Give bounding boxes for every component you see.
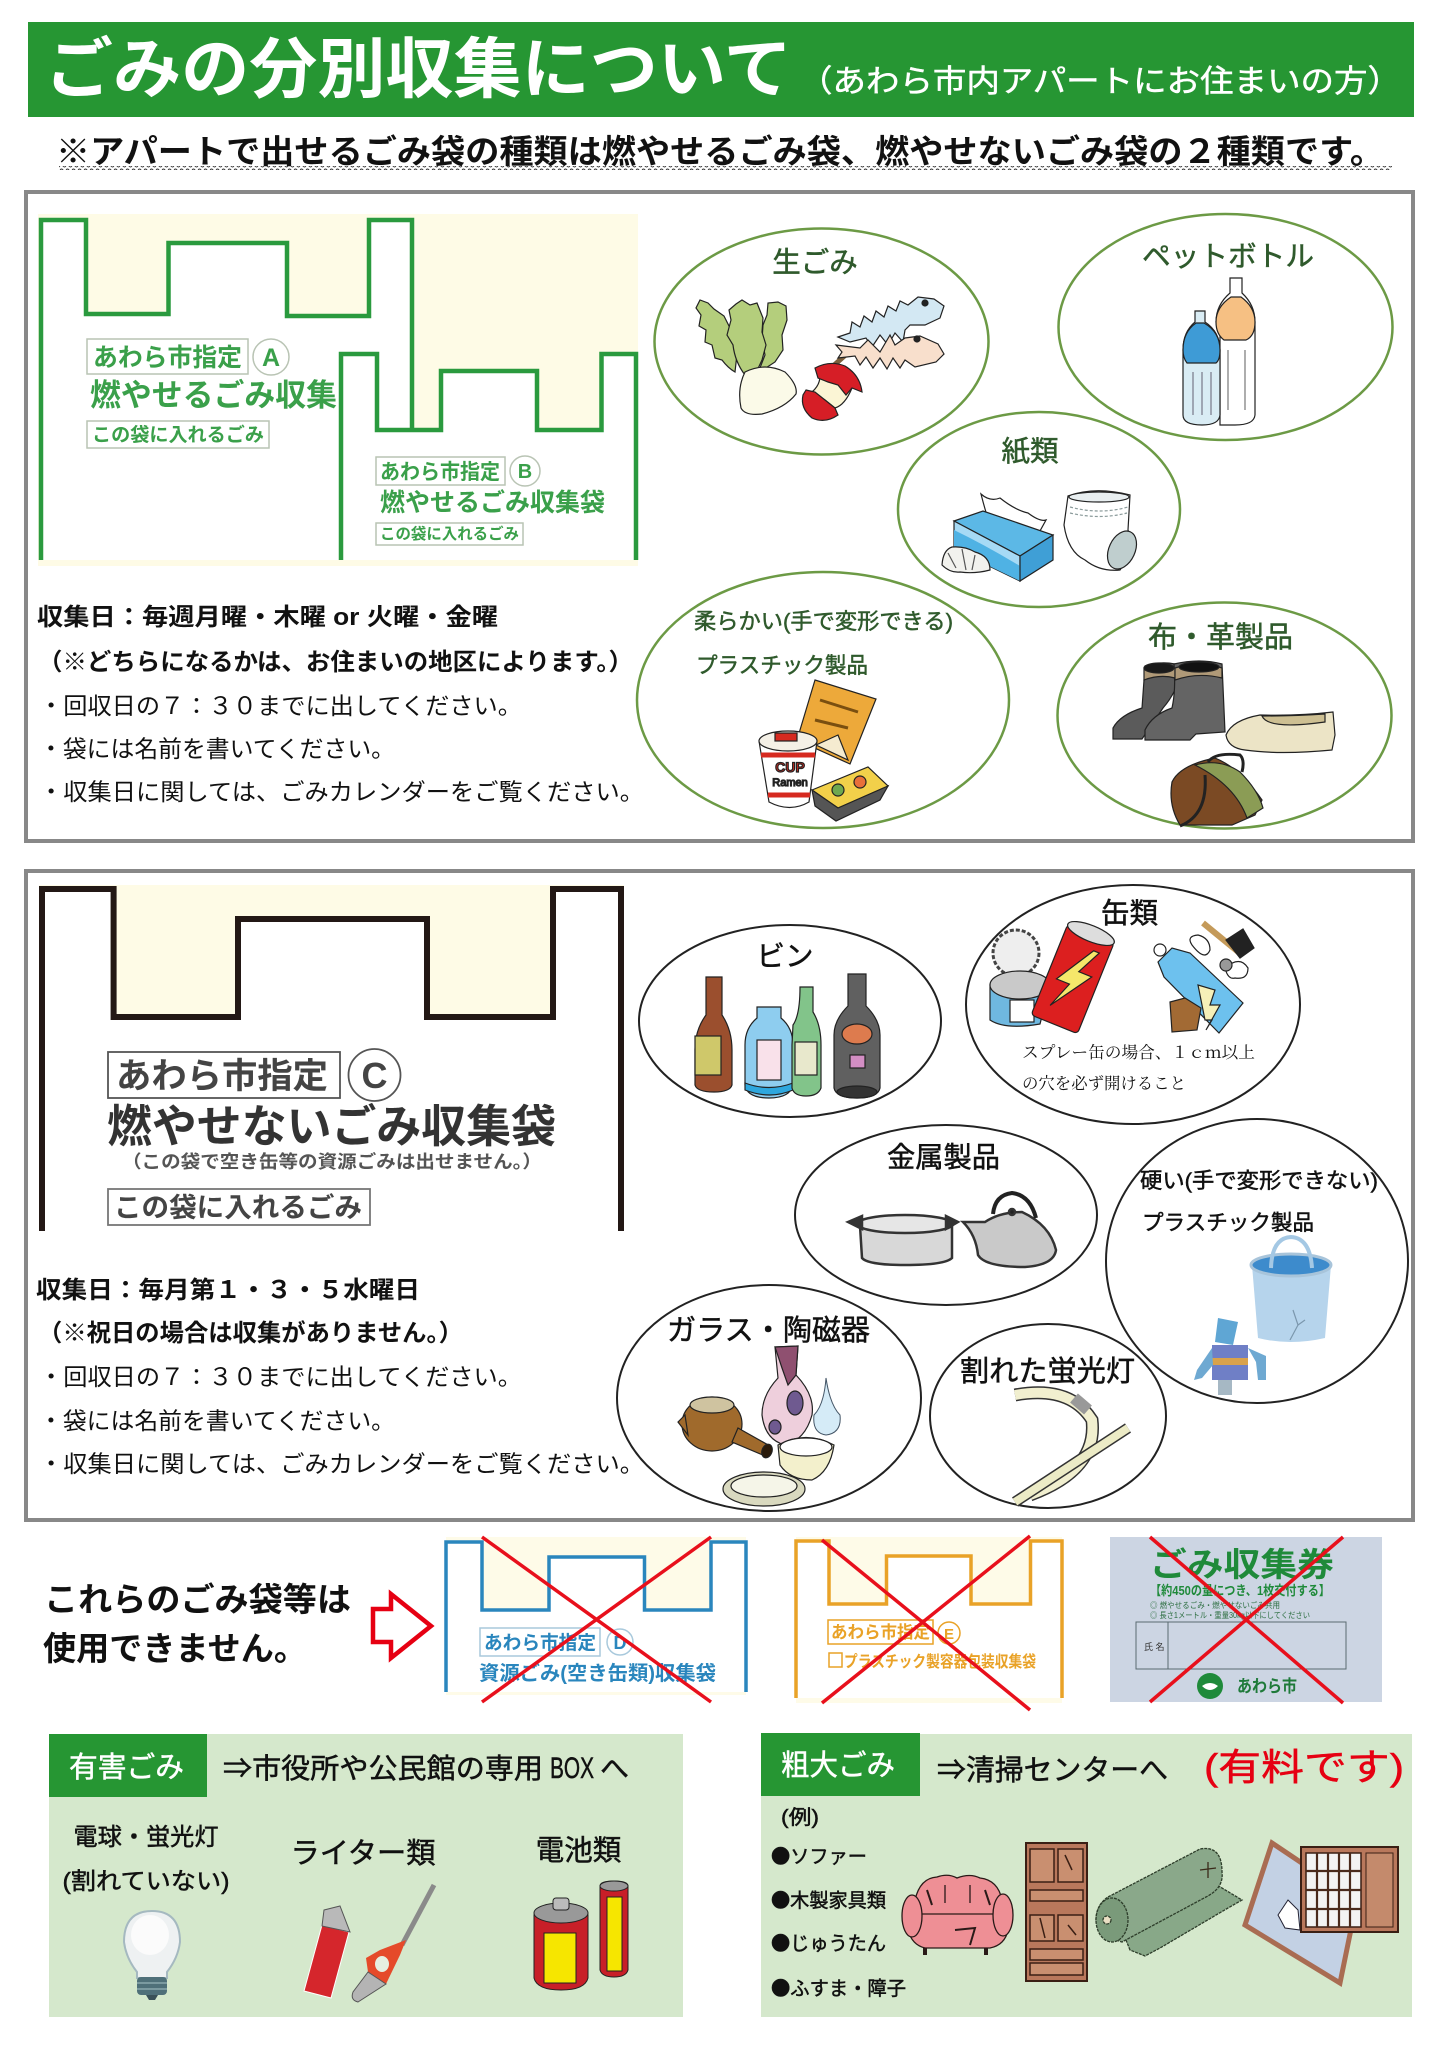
bubble: cans xyxy=(966,885,1300,1124)
oversized tab: 粗大ごみ xyxy=(781,1749,895,1782)
icon: circular lamp xyxy=(1015,1393,1092,1495)
icon: kettle xyxy=(963,1193,1056,1267)
panel: non-burnable waste xyxy=(26,871,1413,1520)
prohibited message: 使用できません。 xyxy=(43,1630,307,1667)
icon: spray can and hammer xyxy=(1154,923,1254,1033)
bubble: paper xyxy=(898,412,1180,607)
icon: tissue box xyxy=(942,494,1053,581)
hazardous destination: へ xyxy=(600,1753,629,1784)
bubble: PET bottles: ペットボトル xyxy=(1142,241,1314,273)
icon: shoe xyxy=(1226,712,1335,752)
bag C xyxy=(39,885,624,1231)
icon: glass bottles xyxy=(695,974,880,1098)
bubble: soft plastics: 柔らかい(手で変形できる) xyxy=(694,609,953,634)
bubble: metal products: 金属製品 xyxy=(887,1142,1000,1174)
icon: light bulb xyxy=(124,1911,180,2000)
collection schedule text: ・袋には名前を書いてください。 xyxy=(39,1408,395,1434)
collection schedule text: ・回収日の７：３０までに出してください。 xyxy=(39,1364,522,1390)
icon: daikon radish xyxy=(696,300,796,414)
icon: carpet roll xyxy=(1096,1848,1242,1965)
title: ごみの分別収集について xyxy=(45,32,792,106)
oversized tab xyxy=(761,1733,920,1796)
bubble: kitchen waste xyxy=(654,228,988,454)
bulb label xyxy=(62,1824,230,1894)
bubble: PET bottles xyxy=(1058,214,1392,440)
bag C: あわら市指定 xyxy=(116,1057,328,1096)
icon: sofa xyxy=(902,1875,1013,1955)
bag C label xyxy=(108,1052,340,1098)
spray can warning: の穴を必ず開けること xyxy=(1022,1074,1186,1093)
prohibited message xyxy=(43,1581,351,1667)
icon: cup noodle: Ramen xyxy=(772,777,808,789)
bubble: bottles xyxy=(639,925,941,1117)
icon: cabinet xyxy=(1026,1843,1087,1981)
hazardous tab: 有害ごみ xyxy=(69,1751,184,1784)
icon: lighters xyxy=(304,1885,434,2002)
icon: sake bottle xyxy=(762,1346,812,1445)
bulb label: 電球・蛍光灯 xyxy=(74,1824,218,1851)
bubble: cloth and leather xyxy=(1058,602,1392,828)
collection schedule text: （※祝日の場合は収集がありません。） xyxy=(38,1319,463,1347)
crossed bag E: E xyxy=(944,1626,954,1643)
bag C name: 燃やせないごみ収集袋 xyxy=(107,1101,556,1152)
icon: batteries xyxy=(534,1881,628,1990)
bubble: broken fluorescent lamps: 割れた蛍光灯 xyxy=(960,1355,1135,1388)
crossed collection ticket: あわら市 xyxy=(1237,1676,1297,1696)
collection schedule text: ・袋には名前を書いてください。 xyxy=(39,736,395,762)
bag A label: 燃やせるごみ収集 xyxy=(90,378,337,413)
panel: oversized waste xyxy=(761,1733,1412,2017)
battery label: 電池類 xyxy=(536,1835,621,1867)
icon: small glass drop xyxy=(814,1378,840,1435)
crossed collection ticket: ごみ収集券 xyxy=(1150,1546,1334,1583)
crossed bag D xyxy=(446,1537,746,1702)
bag A label: この袋に入れるごみ xyxy=(92,423,264,446)
collection schedule text xyxy=(37,604,644,805)
crossed bag E: あわら市指定 xyxy=(831,1622,930,1642)
crossed bag D: あわら市指定 xyxy=(484,1632,596,1654)
crossed collection ticket: 【約450の量につき、1枚交付する】 xyxy=(1150,1583,1330,1598)
hazardous destination: BOX xyxy=(550,1752,594,1785)
icon: diaper xyxy=(1064,491,1142,574)
prohibited message: これらのごみ袋等は xyxy=(44,1581,351,1618)
fee note: (有料です) xyxy=(1204,1747,1404,1788)
icon: bucket xyxy=(1251,1237,1331,1342)
bulb label: (割れていない) xyxy=(62,1868,230,1894)
examples list: ●じゅうたん xyxy=(771,1927,886,1956)
icon: straight lamp xyxy=(1015,1428,1128,1502)
bubble: cans: 缶類 xyxy=(1101,898,1158,930)
crossed bag D: D xyxy=(614,1633,626,1653)
bubble: bottles: ビン xyxy=(756,941,814,973)
bag C note: （この袋で空き缶等の資源ごみは出せません。） xyxy=(122,1151,542,1172)
subtitle: （あわら市内アパートにお住まいの方） xyxy=(799,64,1401,99)
icon: cup noodle: CUP xyxy=(775,759,805,775)
hazardous destination: ⇒市役所や公民館の専用 xyxy=(223,1753,543,1784)
hazardous tab xyxy=(49,1734,207,1797)
crossed bag E xyxy=(796,1536,1062,1710)
bubble: hard plastics xyxy=(1106,1119,1408,1403)
icon: cup noodle xyxy=(759,731,817,808)
arrow xyxy=(373,1594,431,1658)
examples list: ●ソファー xyxy=(771,1840,867,1869)
header banner xyxy=(28,22,1414,117)
icon: bag xyxy=(1171,754,1263,826)
crossed bag D: 資源ごみ(空き缶類)収集袋 xyxy=(479,1661,716,1685)
panel: burnable waste xyxy=(26,192,1413,841)
bubble: glass and ceramics xyxy=(617,1285,921,1511)
collection schedule text: 収集日：毎週月曜・木曜 or 火曜・金曜 xyxy=(37,604,498,631)
panel: hazardous waste xyxy=(49,1734,683,2017)
crossed collection ticket: ◎ 長さ1メートル・重量30kg以下にしてください xyxy=(1150,1610,1310,1620)
bag B label: この袋に入れるごみ xyxy=(380,524,519,543)
icon: apple core xyxy=(802,351,862,420)
icon: food tray xyxy=(812,767,888,821)
oversized destination: ⇒清掃センターへ xyxy=(937,1754,1168,1787)
examples list xyxy=(771,1806,906,2001)
spray can warning: スプレー缶の場合、１ｃｍ以上 xyxy=(1022,1043,1255,1062)
collection schedule text: 収集日：毎月第１・３・５水曜日 xyxy=(36,1277,420,1304)
bag A label: あわら市指定 xyxy=(93,344,242,372)
icon: snack bag xyxy=(797,680,876,764)
icon: red can xyxy=(1031,917,1117,1034)
icon: pot xyxy=(848,1215,958,1265)
collection schedule text xyxy=(36,1277,644,1477)
examples list: ●ふすま・障子 xyxy=(771,1972,906,2001)
collection schedule text: ・収集日に関しては、ごみカレンダーをご覧ください。 xyxy=(39,779,644,805)
spray can warning xyxy=(1022,1043,1255,1093)
bubble: kitchen waste: 生ごみ xyxy=(772,247,858,279)
bubble: broken fluorescent lamps xyxy=(930,1324,1166,1508)
bag C letter: C xyxy=(362,1055,388,1096)
icon: teapot xyxy=(678,1397,774,1459)
bag B label xyxy=(376,456,605,545)
icon: broken plate xyxy=(723,1472,805,1506)
examples list: ●木製家具類 xyxy=(771,1884,886,1913)
lighter label: ライター類 xyxy=(290,1838,436,1870)
icon: fish bones xyxy=(836,297,944,369)
icon: broken toy robot xyxy=(1194,1318,1266,1395)
bag C letter xyxy=(348,1049,400,1101)
bubble: paper: 紙類 xyxy=(1001,436,1059,468)
bag B label: B xyxy=(518,461,532,483)
bubble: cloth and leather: 布・革製品 xyxy=(1148,621,1293,654)
bubble: soft plastics: プラスチック製品 xyxy=(696,653,868,678)
bubble: hard plastics: 硬い(手で変形できない) xyxy=(1140,1169,1378,1193)
bubble: soft plastics xyxy=(637,572,1009,828)
collection schedule text: （※どちらになるかは、お住まいの地区によります。） xyxy=(38,649,633,676)
bag A label: A xyxy=(262,344,280,372)
icon: tin can xyxy=(990,930,1050,1026)
bag B label: 燃やせるごみ収集袋 xyxy=(380,488,605,517)
notice line: ※アパートで出せるごみ袋の種類は燃やせるごみ袋、燃やせないごみ袋の２種類です。 xyxy=(56,133,1384,170)
bag B label: あわら市指定 xyxy=(380,461,500,484)
bubble: glass and ceramics: ガラス・陶磁器 xyxy=(667,1314,870,1347)
bag A label xyxy=(87,339,337,448)
icon: boots xyxy=(1113,661,1225,740)
bags A and B xyxy=(38,214,638,566)
icon: broken cup xyxy=(778,1438,834,1480)
icon: bottles xyxy=(1183,278,1255,425)
collection schedule text: ・回収日の７：３０までに出してください。 xyxy=(39,693,522,719)
crossed collection ticket: ◎ 燃やせるごみ・燃やせないごみ共用 xyxy=(1150,1600,1280,1610)
crossed collection ticket: 氏 名 xyxy=(1144,1641,1165,1652)
examples list: (例) xyxy=(781,1806,819,1829)
icon: fusuma and shoji xyxy=(1245,1843,1398,1983)
crossed bag E: プラスチック製容器包装収集袋 xyxy=(844,1652,1036,1671)
crossed collection ticket xyxy=(1110,1537,1382,1703)
bubble: metal products xyxy=(795,1125,1097,1305)
bubble: hard plastics: プラスチック製品 xyxy=(1142,1211,1314,1235)
prohibited bags row xyxy=(43,1536,1382,1710)
collection schedule text: ・収集日に関しては、ごみカレンダーをご覧ください。 xyxy=(39,1451,644,1477)
bag C sub-label: この袋に入れるごみ xyxy=(114,1192,362,1223)
